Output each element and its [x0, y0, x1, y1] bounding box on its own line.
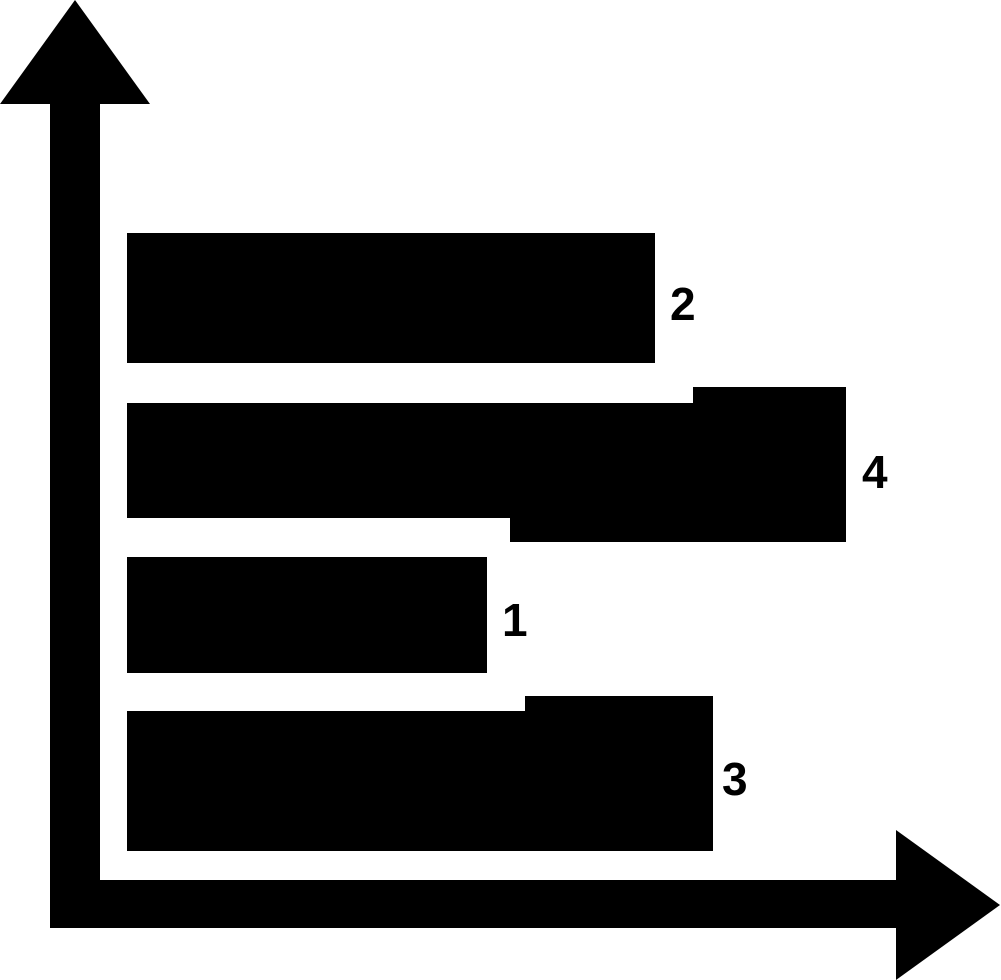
axis: vertical arrow — [0, 0, 150, 928]
label 3: 3 — [722, 753, 748, 805]
bar 2 — [127, 233, 696, 363]
label 2: 2 — [670, 278, 696, 330]
bar 4 — [127, 387, 888, 542]
label 4: 4 — [862, 446, 888, 498]
axis: horizontal arrow — [50, 830, 1000, 980]
label 1: 1 — [502, 594, 528, 646]
bar 1 — [127, 557, 528, 673]
bar 3 — [127, 696, 748, 851]
